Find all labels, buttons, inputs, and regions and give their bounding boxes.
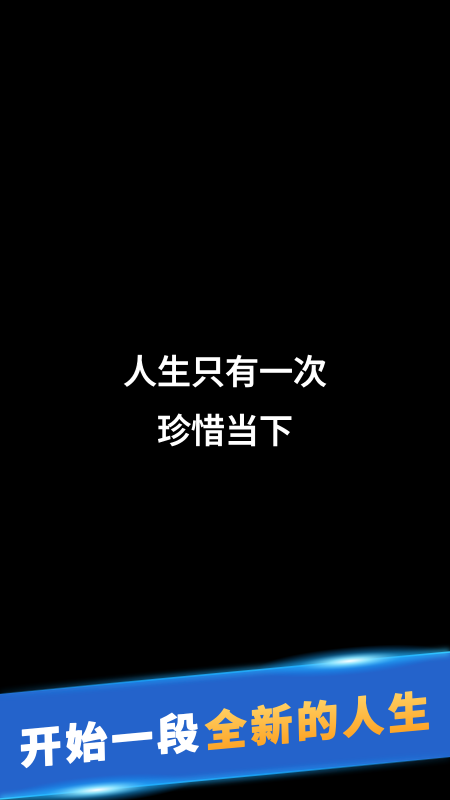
quote text block xyxy=(123,354,327,451)
headline gold part: 全新的人生 xyxy=(204,688,434,756)
headline white part: 开始一段 xyxy=(19,709,203,773)
banner headline xyxy=(19,688,434,773)
quote line 2: 珍惜当下 xyxy=(157,413,293,451)
quote line 1: 人生只有一次 xyxy=(123,354,327,392)
banner band xyxy=(0,652,450,800)
top glow line xyxy=(0,638,450,694)
bottom glow line xyxy=(0,757,450,800)
